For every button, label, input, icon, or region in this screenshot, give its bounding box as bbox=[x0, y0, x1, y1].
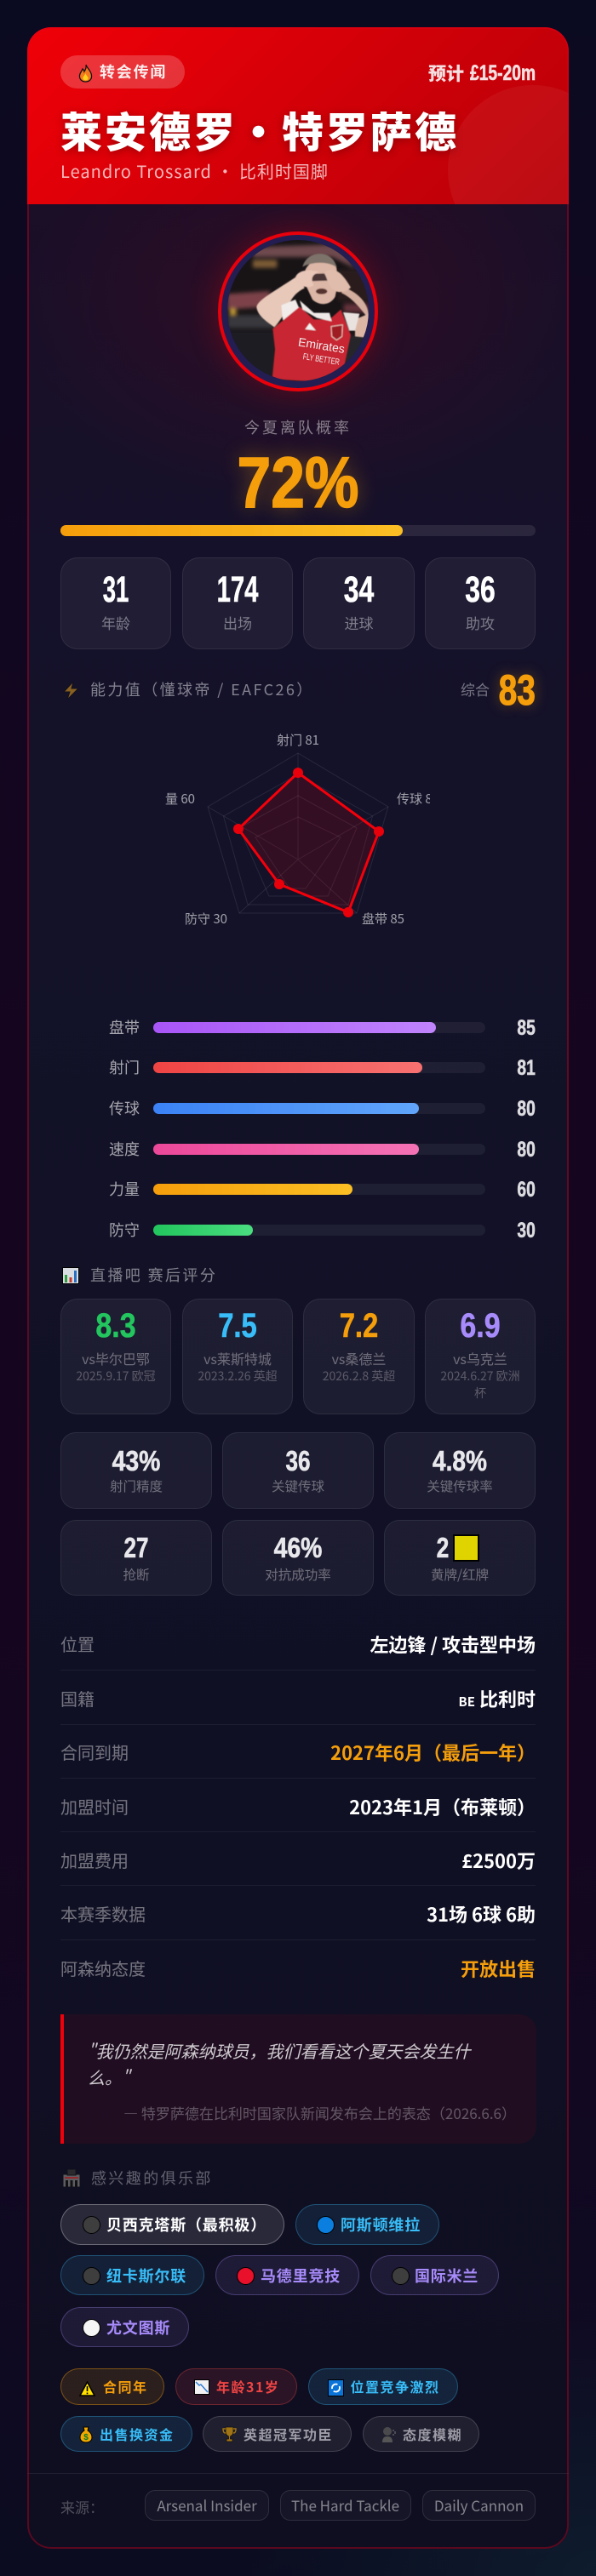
row: nationality bbox=[60, 1685, 536, 1712]
strength bar bbox=[153, 1184, 485, 1195]
club pill: Atletico Madrid bbox=[215, 2255, 359, 2295]
subtitle: Leandro Trossard ・ 比利时国脚 bbox=[60, 158, 329, 183]
row: Arsenal stance: 阿森纳态度 bbox=[60, 1956, 146, 1980]
value: 4.8% bbox=[433, 1445, 487, 1476]
club dot bbox=[237, 2267, 255, 2285]
value: 36 bbox=[285, 1445, 311, 1476]
sources label: 来源： bbox=[60, 2496, 104, 2517]
defending bar bbox=[153, 1225, 485, 1236]
mini stat: key pass rate bbox=[384, 1432, 536, 1509]
estimated fee: 预计 bbox=[428, 60, 464, 86]
stat card: age bbox=[60, 557, 171, 649]
club dot bbox=[83, 2319, 100, 2337]
defending value: 30 bbox=[518, 1219, 536, 1242]
date: 2025.9.17 欧冠 bbox=[76, 1368, 156, 1385]
label: 关键传球率 bbox=[427, 1476, 493, 1495]
strength value: 60 bbox=[518, 1178, 536, 1202]
tag: contract year bbox=[60, 2368, 164, 2405]
quote text: 么。" bbox=[88, 2065, 129, 2089]
source chip: Arsenal Insider bbox=[145, 2490, 269, 2521]
appearances label: 出场 bbox=[223, 612, 252, 633]
rating card: Bilbao bbox=[60, 1299, 171, 1414]
club dot bbox=[83, 2216, 100, 2234]
value: 43% bbox=[112, 1445, 160, 1476]
pace value: 80 bbox=[518, 1138, 536, 1162]
bar row: shooting bbox=[109, 1056, 536, 1080]
opponent: vs桑德兰 bbox=[332, 1348, 386, 1368]
estimated fee: £15-20m bbox=[470, 61, 536, 85]
club pill: Juventus bbox=[60, 2307, 189, 2347]
value: 46% bbox=[274, 1532, 322, 1563]
source chip: The Hard Tackle: The Hard Tackle bbox=[291, 2494, 399, 2516]
tag text: 年龄31岁 bbox=[216, 2376, 279, 2396]
label: 射门精度 bbox=[110, 1476, 163, 1495]
opponent: vs毕尔巴鄂 bbox=[82, 1348, 150, 1368]
value: 27 bbox=[123, 1532, 149, 1563]
bar row: dribbling bbox=[109, 1016, 536, 1040]
icon: bar chart bbox=[62, 1267, 79, 1284]
row: position bbox=[60, 1631, 536, 1658]
quote block bbox=[60, 2014, 536, 2144]
radar axis labels: 盘带 85 bbox=[362, 910, 404, 928]
club pill: Inter Milan bbox=[370, 2255, 499, 2295]
mini stat: key passes bbox=[222, 1432, 374, 1509]
mini stat: tackles bbox=[60, 1520, 212, 1596]
mini stat: shot accuracy bbox=[60, 1432, 212, 1509]
radar axis labels bbox=[152, 731, 439, 928]
row: fee bbox=[60, 1847, 536, 1874]
rating card: Sunderland bbox=[303, 1299, 415, 1414]
quote attribution: — 特罗萨德在比利时国家队新闻发布会上的表态（2026.6.6） bbox=[123, 2102, 516, 2123]
rating 6.9: 6.9 bbox=[460, 1307, 501, 1345]
tag text: 位置竞争激烈 bbox=[351, 2376, 440, 2396]
tag: Premier League champion bbox=[203, 2416, 352, 2452]
shooting value: 81 bbox=[518, 1056, 536, 1080]
pace label: 速度 bbox=[109, 1138, 140, 1160]
opponent: vs乌克兰 bbox=[453, 1348, 507, 1368]
icon: chart down bbox=[194, 2379, 209, 2395]
tag: ambiguous attitude bbox=[363, 2416, 479, 2452]
overall rating label: 综合 bbox=[461, 678, 490, 700]
club pill: Besiktas bbox=[60, 2204, 284, 2245]
row: season stats bbox=[60, 1900, 536, 1928]
pace bar bbox=[153, 1144, 485, 1155]
date: 2023.2.26 英超 bbox=[198, 1368, 278, 1385]
tag text: 态度模糊 bbox=[403, 2424, 462, 2444]
shirt sponsor text: FLY BETTER bbox=[302, 352, 340, 368]
club dot bbox=[83, 2267, 100, 2285]
label: 抢断 bbox=[123, 1565, 150, 1584]
icon: yellow card bbox=[453, 1534, 479, 1562]
goals value: 34 bbox=[344, 569, 374, 610]
club pill: Newcastle bbox=[60, 2255, 204, 2295]
club name: 纽卡斯尔联 bbox=[106, 2265, 186, 2287]
row: position: 位置 bbox=[60, 1631, 95, 1656]
strength label: 力量 bbox=[109, 1178, 140, 1200]
probability value 72%: 72% bbox=[238, 443, 358, 523]
bar row: strength bbox=[109, 1178, 536, 1202]
badge: transfer rumour bbox=[60, 55, 185, 89]
icon: money bag bbox=[80, 2427, 92, 2442]
row: position: 左边锋 / 攻击型中场 bbox=[370, 1631, 536, 1658]
row: fee: 加盟费用 bbox=[60, 1848, 129, 1872]
rating 7.2: 7.2 bbox=[340, 1307, 378, 1345]
tag text: 英超冠军功臣 bbox=[244, 2424, 333, 2444]
passing label: 传球 bbox=[109, 1097, 140, 1119]
source chip: The Hard Tackle bbox=[279, 2490, 410, 2521]
club name: 贝西克塔斯（最积极） bbox=[106, 2213, 266, 2236]
row: contract: 2027年6月（最后一年） bbox=[330, 1739, 536, 1766]
row: joined: 加盟时间 bbox=[60, 1794, 129, 1819]
defending label: 防守 bbox=[109, 1219, 140, 1241]
row: contract: 合同到期 bbox=[60, 1739, 129, 1764]
mini stat: duel success bbox=[222, 1520, 374, 1596]
row: joined: 2023年1月（布莱顿） bbox=[349, 1793, 536, 1820]
rating 8.3: 8.3 bbox=[95, 1307, 136, 1345]
club pill: Aston Villa bbox=[295, 2204, 439, 2245]
row: nationality: 国籍 bbox=[60, 1686, 95, 1711]
radar data polygon bbox=[238, 773, 379, 912]
heading: ability ratings: 能力值（懂球帝 / EAFC26） bbox=[90, 678, 314, 700]
progress bar bbox=[60, 525, 536, 536]
dribbling bar bbox=[153, 1022, 485, 1033]
passing value: 80 bbox=[518, 1097, 536, 1121]
mini stat: cards bbox=[384, 1520, 536, 1596]
info table bbox=[60, 1631, 536, 1982]
row: nationality: BE 比利时 bbox=[459, 1685, 536, 1712]
icon: flame bbox=[78, 65, 92, 83]
row: season stats: 31场 6球 6助 bbox=[427, 1900, 536, 1928]
title: player name: 莱安德罗・特罗萨德 bbox=[60, 100, 459, 160]
date: 2026.2.8 英超 bbox=[323, 1368, 395, 1385]
icon: stadium bbox=[63, 2169, 80, 2187]
shooting bar bbox=[153, 1062, 485, 1073]
opponent: vs莱斯特城 bbox=[203, 1348, 272, 1368]
heading: interested clubs: 感兴趣的俱乐部 bbox=[91, 2167, 213, 2189]
label: 黄牌/红牌 bbox=[431, 1565, 489, 1584]
age value: 31 bbox=[103, 569, 129, 610]
label: 对抗成功率 bbox=[265, 1565, 331, 1584]
label: 关键传球 bbox=[272, 1476, 324, 1495]
header banner bbox=[27, 27, 569, 204]
age label: 年龄 bbox=[101, 612, 130, 633]
club dot bbox=[317, 2216, 335, 2234]
quote text: "我仍然是阿森纳球员，我们看看这个夏天会发生什 bbox=[88, 2038, 470, 2063]
date: 2024.6.27 欧洲 bbox=[440, 1368, 520, 1385]
estimated fee bbox=[428, 60, 536, 86]
row: Arsenal stance: 开放出售 bbox=[461, 1955, 536, 1982]
stat card: appearances bbox=[182, 557, 293, 649]
club name: 尤文图斯 bbox=[106, 2316, 170, 2339]
source chip: Daily Cannon bbox=[422, 2490, 536, 2521]
stat card: goals bbox=[303, 557, 415, 649]
tag: position competition bbox=[308, 2368, 458, 2405]
bar row: defending bbox=[109, 1219, 536, 1242]
assists label: 助攻 bbox=[466, 612, 495, 633]
row: fee: £2500万 bbox=[461, 1847, 536, 1874]
dribbling value: 85 bbox=[518, 1016, 536, 1040]
tag: sell for funds bbox=[60, 2416, 192, 2452]
heading: post-match ratings: 直播吧 赛后评分 bbox=[90, 1264, 217, 1286]
icon: lightning bbox=[63, 682, 79, 700]
source chip: Arsenal Insider: Arsenal Insider bbox=[157, 2494, 257, 2516]
club name: 马德里竞技 bbox=[261, 2265, 341, 2287]
tag: age 31 bbox=[175, 2368, 297, 2405]
icon: money bag: $ bbox=[83, 2433, 89, 2442]
value 2: 2 bbox=[437, 1532, 449, 1563]
icon: warning bbox=[79, 2381, 95, 2396]
stat card: assists bbox=[425, 557, 536, 649]
tag text: 出售换资金 bbox=[100, 2424, 175, 2444]
overall rating 83: 83 bbox=[499, 666, 536, 714]
bar row: passing bbox=[109, 1097, 536, 1121]
club dot bbox=[392, 2267, 410, 2285]
club name: 阿斯顿维拉 bbox=[341, 2213, 421, 2236]
radar axis labels: 防守 30 bbox=[185, 910, 227, 928]
source chip: Daily Cannon: Daily Cannon bbox=[434, 2494, 524, 2516]
icon: speaking head bbox=[382, 2427, 395, 2442]
tag text: 合同年 bbox=[103, 2376, 148, 2396]
icon: refresh bbox=[328, 2379, 344, 2396]
radar points bbox=[233, 768, 384, 917]
row: joined bbox=[60, 1793, 536, 1820]
shirt sponsor text: Emirates bbox=[297, 334, 346, 356]
avatar: player photo bbox=[218, 231, 378, 391]
rating card: Ukraine bbox=[425, 1299, 536, 1414]
quote text bbox=[88, 2038, 472, 2089]
dribbling label: 盘带 bbox=[109, 1016, 140, 1038]
club name: 国际米兰 bbox=[415, 2265, 479, 2287]
assists value: 36 bbox=[465, 569, 496, 610]
shooting label: 射门 bbox=[109, 1056, 140, 1078]
rating card: Leicester bbox=[182, 1299, 293, 1414]
row: contract bbox=[60, 1739, 536, 1766]
rating 7.5: 7.5 bbox=[218, 1307, 257, 1345]
shirt sponsor text bbox=[298, 338, 344, 365]
date: 杯 bbox=[474, 1385, 486, 1402]
bar row: pace bbox=[109, 1138, 536, 1162]
date bbox=[440, 1368, 520, 1402]
probability label: 今夏离队概率 bbox=[244, 416, 352, 438]
passing bar bbox=[153, 1103, 485, 1114]
radar chart bbox=[164, 732, 430, 928]
appearances value: 174 bbox=[217, 569, 258, 610]
row: Arsenal stance bbox=[60, 1955, 536, 1982]
icon: trophy bbox=[222, 2427, 237, 2442]
row: season stats: 本赛季数据 bbox=[60, 1901, 146, 1926]
badge text: 转会传闻 bbox=[100, 60, 167, 83]
goals label: 进球 bbox=[344, 612, 373, 633]
